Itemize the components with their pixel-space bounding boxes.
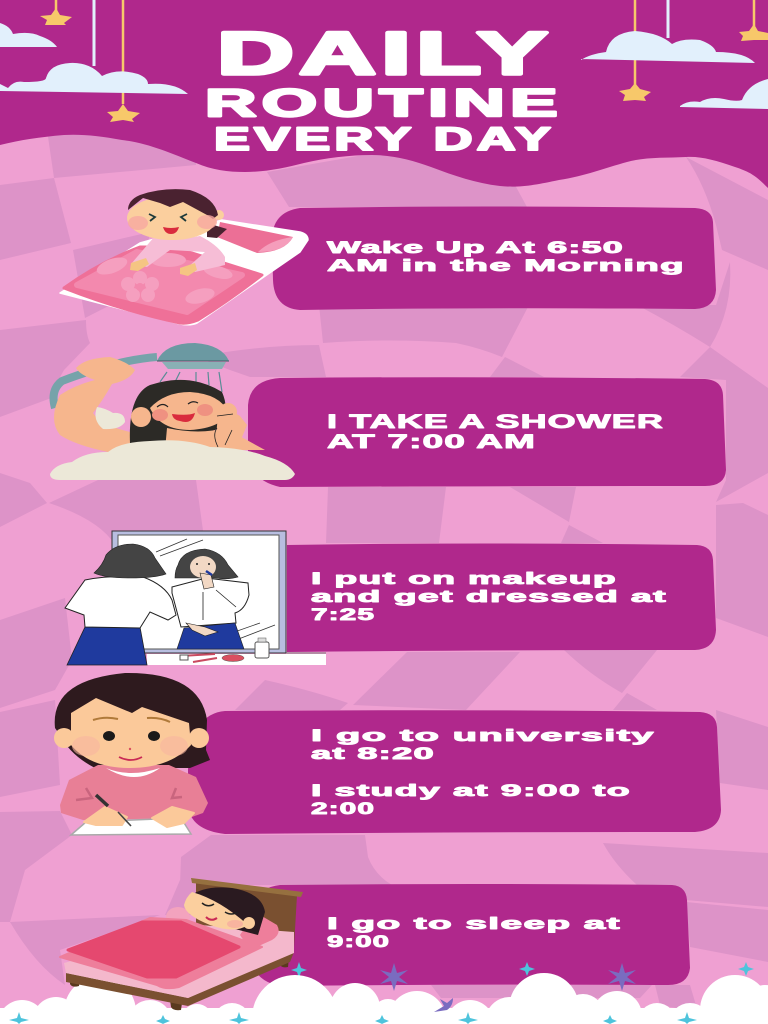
panel: makeup: I put on makeup: [311, 570, 617, 588]
panel: shower: AT 7:00 AM: [327, 431, 536, 453]
hanging decoration: left clouds and stars: [0, 0, 188, 122]
title: [205, 20, 563, 157]
panel: sleep: 9:00: [327, 933, 390, 951]
icon: girl waking up in bed: [60, 189, 308, 325]
icon: girl writing at a desk: [54, 673, 210, 835]
title: ROUTINE: [205, 82, 563, 125]
panel: university: at 8:20: [311, 745, 435, 763]
hanging decoration: right clouds and stars: [581, 0, 768, 109]
clouds and stars at the bottom: [0, 962, 768, 1024]
panel: university: 2:00: [311, 800, 375, 818]
title: DAILY: [217, 20, 553, 87]
header banner with wavy edge: [0, 0, 768, 188]
panel: wake up: [272, 206, 716, 310]
panel: wake up: Wake Up At 6:50: [327, 239, 624, 257]
icon: girl sleeping in bed: [60, 878, 303, 1010]
panel: university: [188, 710, 721, 834]
panel: makeup: [287, 544, 716, 652]
panel: sleep: I go to sleep at: [327, 915, 621, 933]
icon: person taking a shower: [50, 343, 295, 480]
panel: makeup: 7:25: [311, 606, 375, 624]
panel: shower: [248, 377, 726, 487]
panel: university: I go to university: [311, 727, 656, 745]
panel: shower: I TAKE A SHOWER: [327, 411, 664, 433]
panel: university: I study at 9:00 to: [311, 782, 631, 800]
icon: woman doing makeup at a mirror: [65, 531, 326, 665]
panel: makeup: and get dressed at: [311, 588, 667, 606]
title: EVERY DAY: [214, 121, 555, 157]
panel: wake up: AM in the Morning: [327, 257, 685, 275]
panel: sleep: [250, 884, 690, 986]
